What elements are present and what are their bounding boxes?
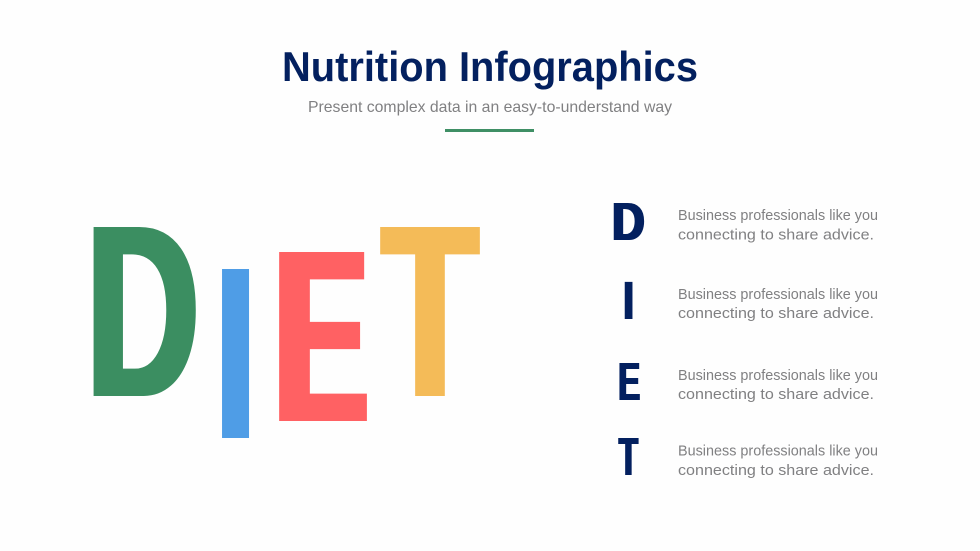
panel: DIET descriptions: [612, 192, 878, 487]
row T: [619, 427, 878, 487]
letter I: I: [210, 217, 262, 491]
title underline: [445, 129, 534, 132]
row I: [621, 271, 878, 331]
row D: [612, 192, 878, 252]
letter T: T: [619, 427, 638, 487]
letter E: E: [276, 200, 367, 474]
description E: connecting to share advice.: [678, 386, 874, 403]
letter D: D: [612, 192, 644, 252]
description T: connecting to share advice.: [678, 462, 874, 479]
letter E: E: [618, 353, 640, 412]
letter T: T: [382, 173, 478, 448]
description D: Business professionals like you: [678, 207, 878, 224]
row E: [618, 353, 878, 412]
description E: Business professionals like you: [678, 367, 878, 384]
letter D: D: [87, 174, 199, 449]
description I: Business professionals like you: [678, 286, 878, 303]
subtitle: Present complex data in an easy-to-understand way: [308, 99, 672, 116]
title: Nutrition Infographics: [282, 43, 698, 90]
letter I: I: [621, 271, 636, 331]
description T: Business professionals like you: [678, 442, 878, 460]
description I: connecting to share advice.: [678, 305, 874, 322]
panel: large DIET lettering: [87, 173, 478, 491]
description D: connecting to share advice.: [678, 226, 874, 244]
